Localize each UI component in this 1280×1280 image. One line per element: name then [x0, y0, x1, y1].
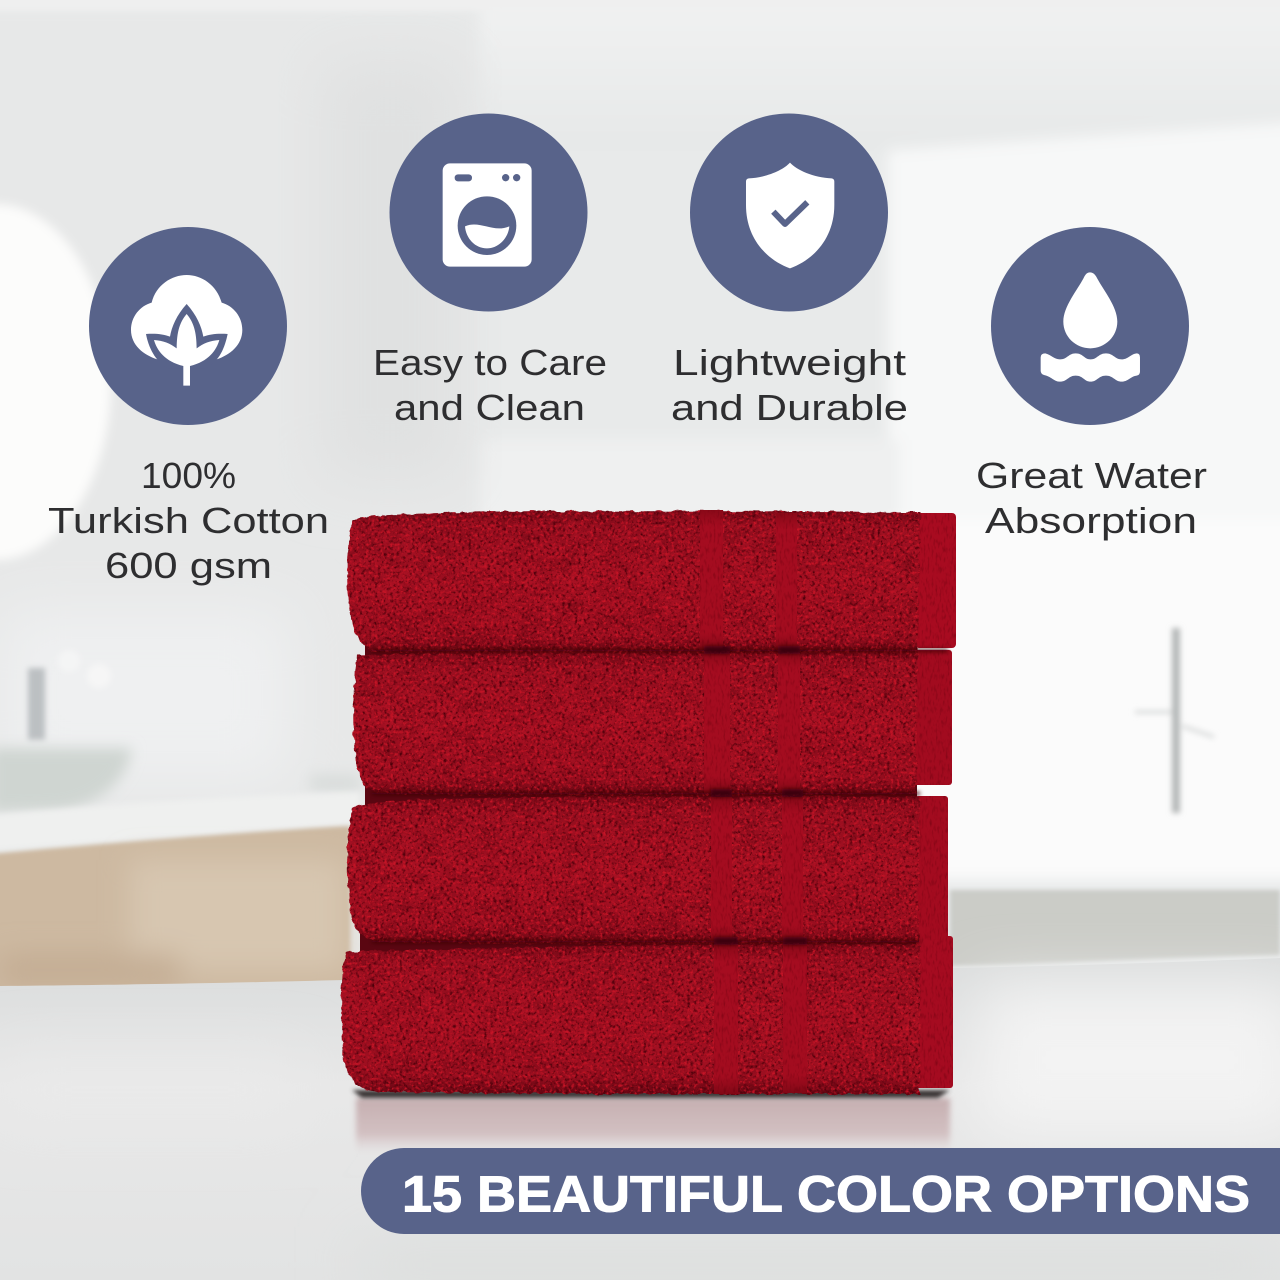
table top [0, 958, 1280, 1280]
feature: lightweight [671, 114, 908, 428]
label: Lightweight and Durable: Lightweight [673, 342, 906, 383]
towel 1 (top) [347, 510, 956, 654]
icon: cotton boll [89, 227, 287, 425]
icon: washing machine [390, 114, 588, 312]
towel 3 [347, 784, 948, 944]
label: Great Water Absorption: Absorption [985, 500, 1197, 541]
feature: Turkish cotton [48, 227, 329, 586]
towel reflection on table [356, 1098, 950, 1153]
icon: shield with check [690, 114, 888, 312]
label: Easy to Care and Clean [373, 342, 607, 428]
label: Lightweight and Durable: and Durable [671, 387, 908, 428]
stack of red towels [341, 510, 956, 1094]
banner: 15 beautiful color options: 15 BEAUTIFUL COLOR OPTIONS [402, 1166, 1250, 1222]
left countertop [0, 792, 360, 850]
label: 100% Turkish Cotton 600 gsm: Turkish Cotton [48, 500, 329, 541]
right faucet [1135, 628, 1214, 813]
icon: water drop over waves [991, 227, 1189, 425]
feature: water absorption [976, 227, 1207, 541]
dark seams between towels [372, 646, 948, 945]
label: 100% Turkish Cotton 600 gsm: 600 gsm [105, 545, 272, 586]
label: 100% Turkish Cotton 600 gsm: 100% [141, 455, 236, 496]
wooden cabinet [0, 826, 350, 992]
left faucet [28, 650, 111, 740]
label: Great Water Absorption [976, 455, 1207, 541]
towel contact shadow [352, 1090, 950, 1098]
banner: 15 beautiful color options [361, 1148, 1280, 1234]
label: Easy to Care and Clean: and Clean [394, 387, 585, 428]
towel 4 (bottom) [341, 930, 953, 1094]
label: 100% Turkish Cotton 600 gsm [48, 455, 329, 586]
label: Lightweight and Durable [671, 342, 908, 428]
right counter band [950, 890, 1280, 966]
feature: easy care [373, 114, 607, 428]
label: Great Water Absorption: Great Water [976, 455, 1207, 496]
left sink [0, 748, 360, 812]
towel 2 [353, 640, 952, 796]
label: Easy to Care and Clean: Easy to Care [373, 342, 607, 383]
